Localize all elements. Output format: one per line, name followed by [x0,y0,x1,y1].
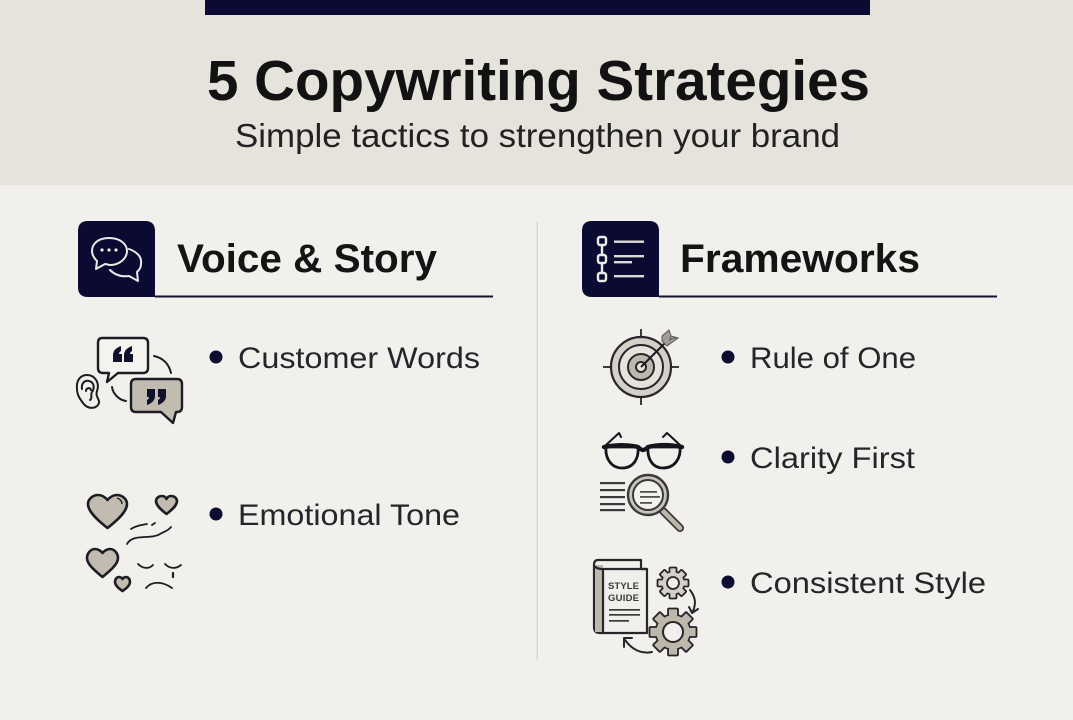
icon: style guide and gears: GUIDE [608,593,639,604]
large gear [650,608,696,656]
title: 5 Copywriting Strategies [207,49,870,113]
item: Rule of One [603,329,916,405]
icon: target with arrow [603,329,679,405]
icon: chat bubbles [78,221,155,297]
icon: style guide and gears [594,560,698,656]
item: Customer Words: Customer Words [238,342,480,375]
small gear [658,568,688,598]
panel: Frameworks [582,221,997,656]
item: Rule of One: Rule of One [750,342,916,375]
icon: glasses and magnifier [600,433,682,528]
bullet [210,508,222,520]
item: Emotional Tone: Emotional Tone [238,499,460,532]
icon: hearts and sad face [87,495,181,591]
item: Customer Words [77,338,480,423]
heading: Frameworks [582,221,997,298]
icon: flow checklist [582,221,659,297]
heading: Frameworks: Frameworks [680,237,920,281]
subtitle: Simple tactics to strengthen your brand [235,117,840,154]
panel: Voice & Story [77,221,493,591]
header band [0,0,1073,185]
item: Clarity First: Clarity First [750,442,916,475]
bullet [722,350,734,364]
item: Consistent Style [594,560,986,656]
item: Emotional Tone [87,495,460,591]
bullet [210,350,222,364]
item: Consistent Style: Consistent Style [750,567,986,600]
heading: Voice & Story [78,221,493,298]
item: Clarity First [600,433,916,528]
heading: Voice & Story: Voice & Story [177,237,438,281]
icon: ear and quotes [77,338,182,423]
bullet [722,450,734,464]
bullet [722,576,734,588]
icon: style guide and gears: STYLE [608,581,639,592]
